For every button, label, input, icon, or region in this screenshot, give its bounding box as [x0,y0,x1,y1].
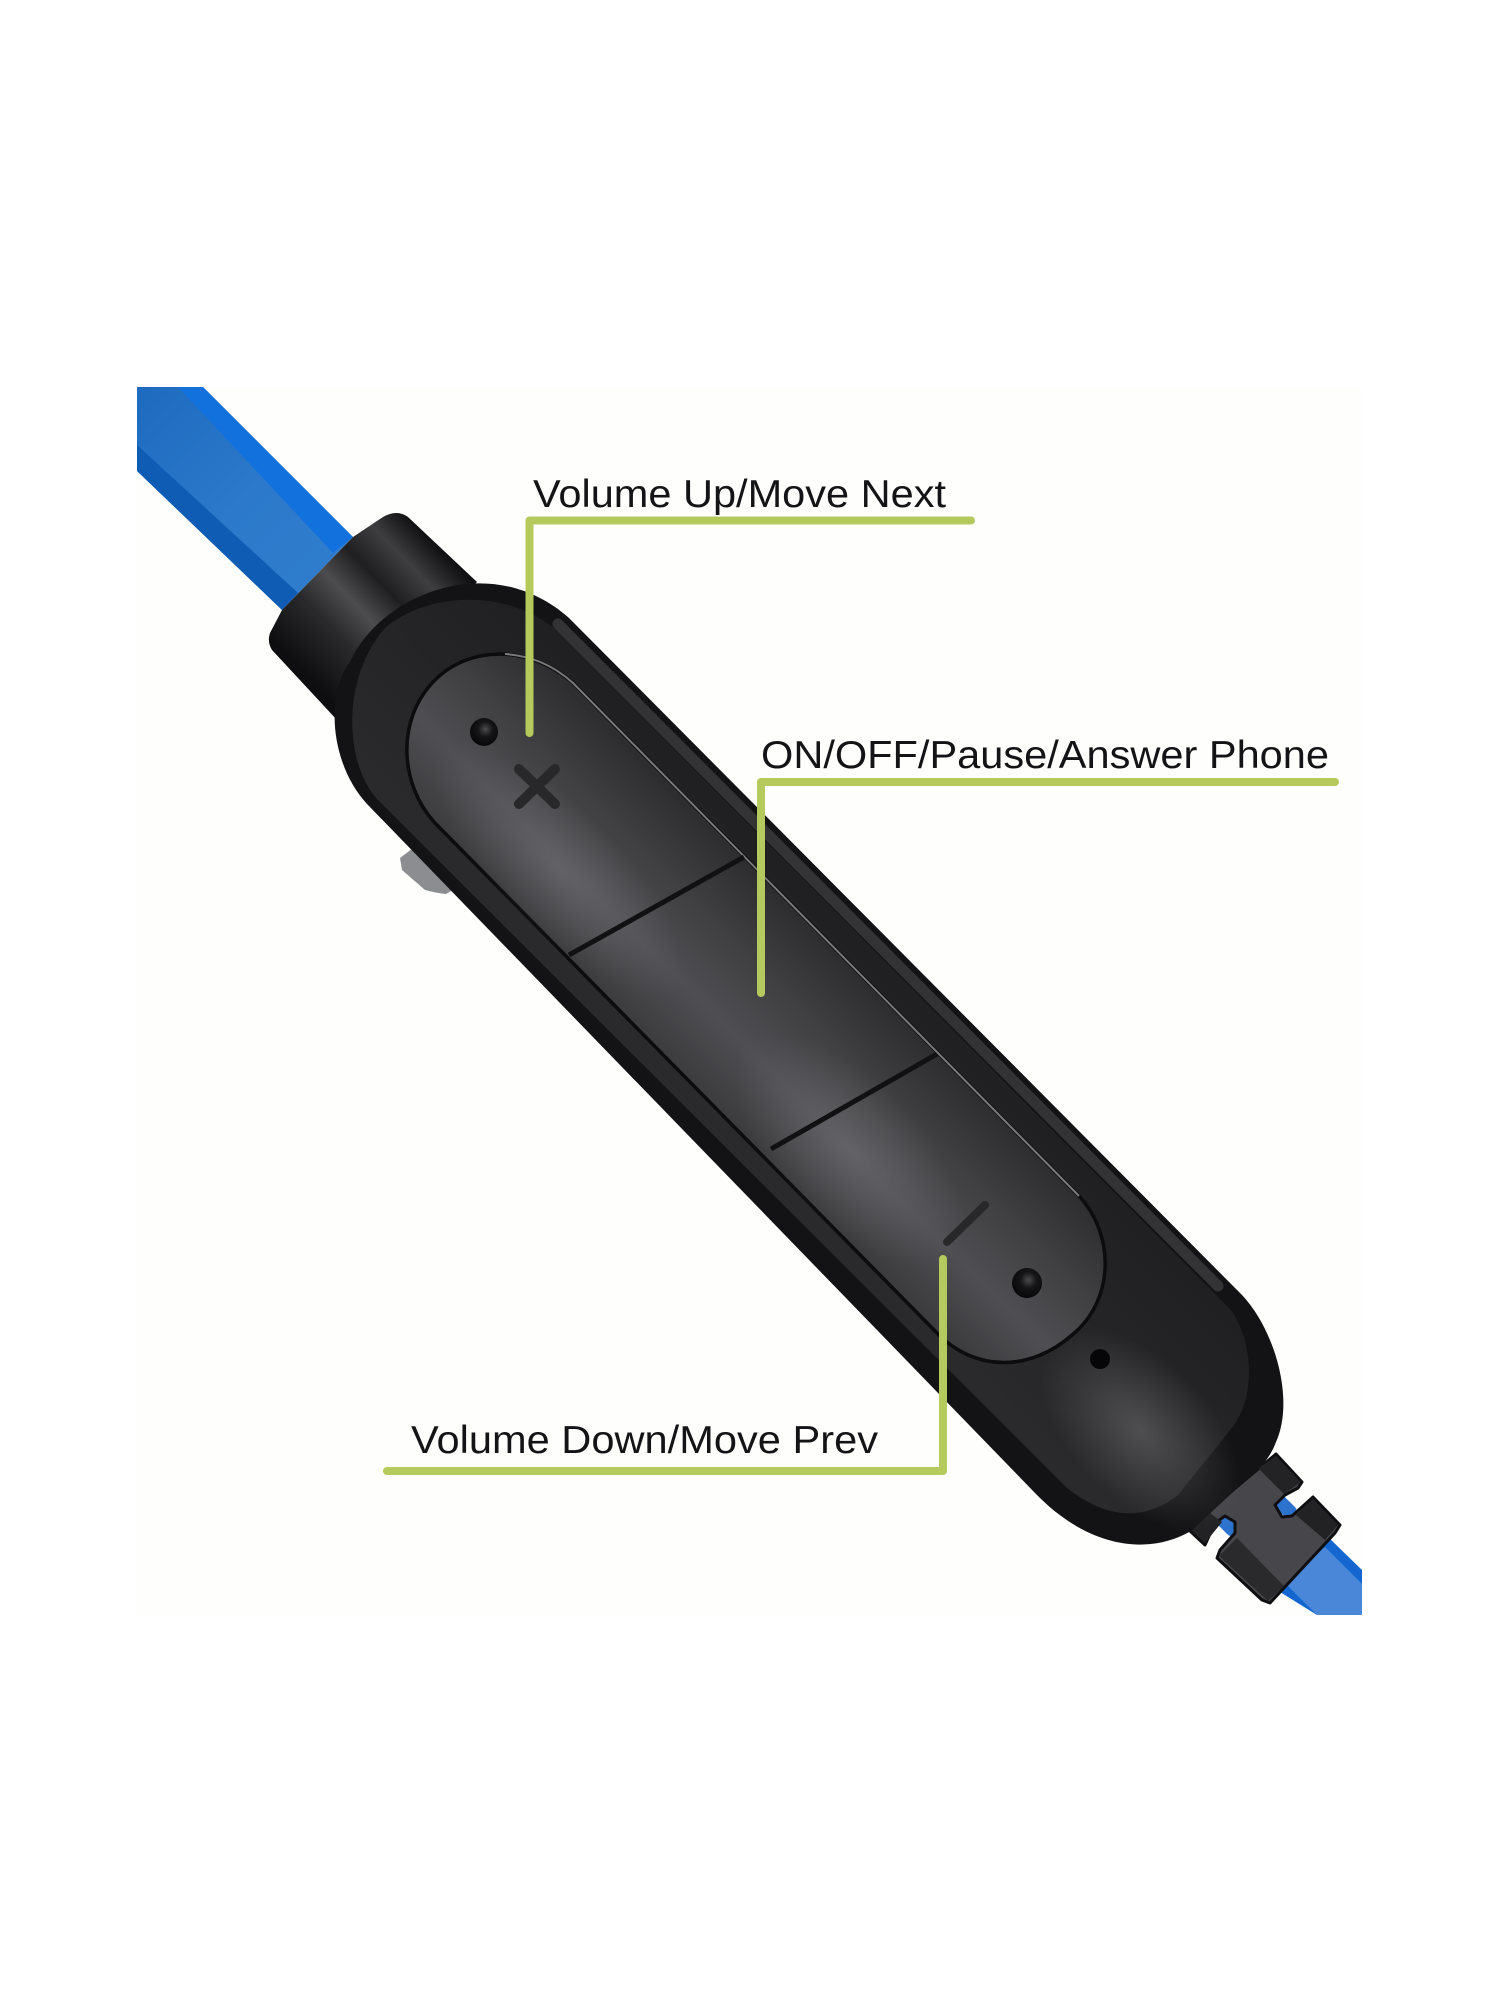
button panel [407,654,1105,1363]
blue slot right [1271,1493,1299,1521]
connector top rail [1258,1456,1301,1494]
icon: microphone hole [1090,1349,1110,1369]
remote control body [335,583,1283,1568]
label: Volume Down/Move Prev [411,1419,879,1462]
leader line [387,1259,943,1471]
upper rim highlight [558,624,1218,1286]
bottom cable connector [1189,1454,1340,1603]
button divider upper [569,857,744,955]
leader line [761,782,1335,993]
outer shell [335,583,1283,1545]
icon: lower indicator dot [1012,1268,1042,1298]
connector left tab [1191,1513,1222,1543]
label: Volume Up/Move Next [533,473,946,516]
leader line [530,520,971,733]
callout: volume up [530,473,971,733]
label: ON/OFF/Pause/Answer Phone [761,734,1329,777]
connector lower rail [1219,1538,1284,1601]
upper blue flat cable [137,387,353,610]
panel highlight upper button [398,707,722,1033]
icon: plus symbol [519,769,555,804]
callout: volume down [387,1259,943,1471]
photo backdrop [137,387,1362,1615]
blue slot left [1215,1512,1241,1538]
face highlight near tip [1002,1292,1278,1568]
inner face [352,600,1249,1513]
icon: minus symbol [947,1205,985,1242]
icon: upper indicator dot [470,718,498,746]
side button nub [400,835,470,894]
lower blue flat cable [1280,1536,1362,1615]
connector plate [1189,1454,1340,1603]
cable collar [269,513,477,720]
callout: on off pause answer [761,734,1335,993]
light edge on panel [505,654,1079,1196]
button divider lower [771,1054,937,1149]
connector right rail [1296,1499,1338,1540]
panel highlight lower button [695,994,1005,1306]
